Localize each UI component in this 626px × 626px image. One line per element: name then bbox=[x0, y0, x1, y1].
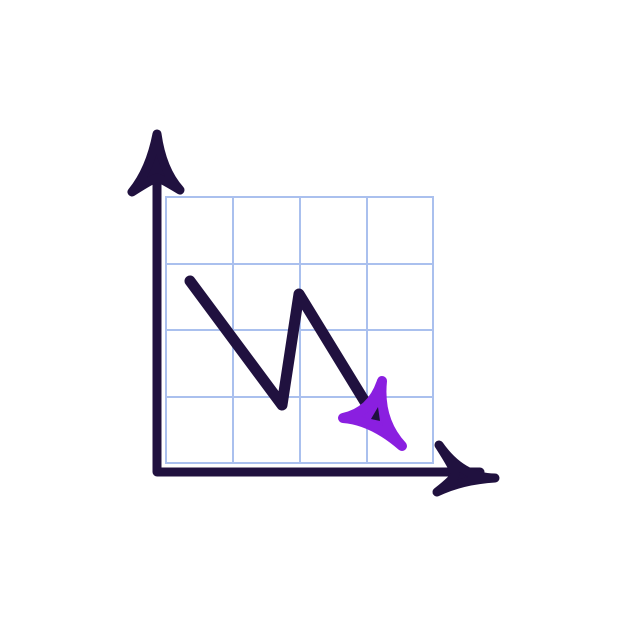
icon: y-axis arrowhead bbox=[132, 134, 180, 192]
grid bbox=[166, 197, 433, 463]
icon: x-axis arrowhead bbox=[437, 445, 495, 492]
trend line bbox=[190, 281, 370, 410]
axes bbox=[132, 134, 495, 492]
icon: purple arrowhead bbox=[343, 381, 402, 446]
